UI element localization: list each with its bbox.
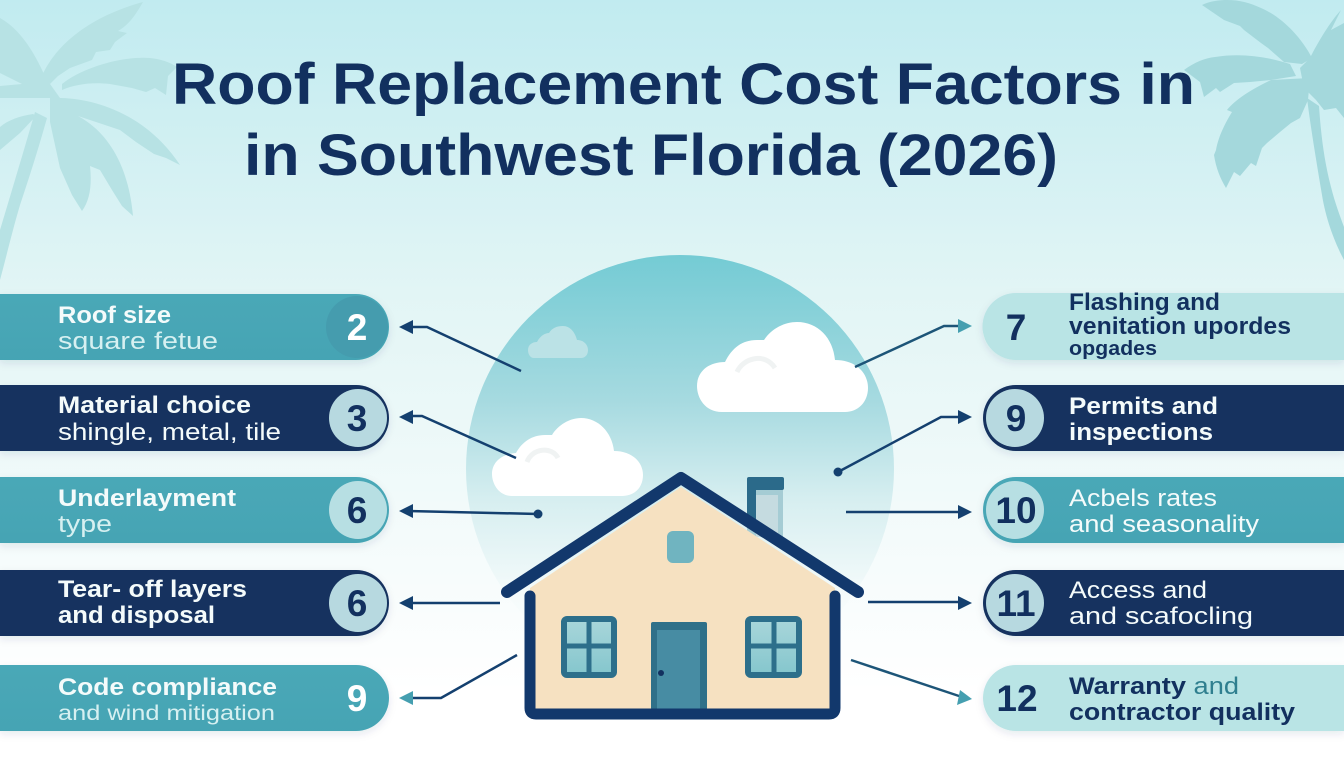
title xyxy=(172,52,1195,188)
bar xyxy=(0,294,389,360)
bar xyxy=(982,293,1344,360)
label xyxy=(1069,393,1218,446)
badge xyxy=(326,296,388,358)
label: and disposal xyxy=(58,602,215,629)
number: 11 xyxy=(996,583,1036,624)
bar xyxy=(983,477,1344,543)
label: and seasonality xyxy=(1069,511,1259,538)
left factor 1 xyxy=(0,294,389,360)
label: square fetue xyxy=(58,328,218,355)
bar xyxy=(983,385,1344,451)
left window xyxy=(564,619,614,675)
right window xyxy=(748,619,799,675)
door xyxy=(651,622,707,710)
number: 6 xyxy=(347,490,367,531)
label xyxy=(1069,485,1259,538)
arrow: to underlayment xyxy=(399,504,542,518)
house outline walls xyxy=(530,596,835,714)
label: Acbels rates xyxy=(1069,485,1217,512)
label xyxy=(58,674,277,725)
bar xyxy=(983,665,1344,731)
label: Roof size xyxy=(58,302,171,329)
title: Roof Replacement Cost Factors in xyxy=(172,52,1195,117)
label: and scafocling xyxy=(1069,603,1253,630)
number: 2 xyxy=(347,307,367,348)
number: 7 xyxy=(1006,307,1026,348)
right factor 5 xyxy=(983,665,1344,731)
arrow: to warranty xyxy=(851,660,972,705)
title: in Southwest Florida (2026) xyxy=(244,123,1058,188)
house attic vent xyxy=(667,531,694,563)
badge xyxy=(986,389,1044,447)
roof xyxy=(507,478,858,592)
icon: house xyxy=(507,477,858,714)
house chimney xyxy=(747,477,784,537)
icon: left cloud xyxy=(492,418,643,496)
arrow: to roof size xyxy=(399,320,521,371)
label: Underlayment xyxy=(58,485,236,512)
icon: left palm tree xyxy=(0,2,180,280)
label: opgades xyxy=(1069,338,1157,360)
label: Code compliance xyxy=(58,674,277,701)
label: type xyxy=(58,511,112,538)
label xyxy=(58,302,218,355)
bar xyxy=(0,570,389,636)
left factor 3 xyxy=(0,477,389,543)
icon: small cloud xyxy=(528,326,588,358)
number: 10 xyxy=(995,490,1037,531)
left factor 4 xyxy=(0,570,389,636)
label: Material choice xyxy=(58,392,251,419)
number: 9 xyxy=(347,678,367,719)
label xyxy=(1069,577,1253,630)
label: venitation upordes xyxy=(1069,313,1291,340)
icon: large cloud xyxy=(697,322,868,412)
arrow: to tear-off xyxy=(399,596,500,610)
label: inspections xyxy=(1069,419,1213,446)
label xyxy=(1069,673,1296,726)
arrow: to flashing xyxy=(855,319,972,367)
right factor 4 xyxy=(983,570,1344,636)
right factor 2 xyxy=(983,385,1344,451)
arrow: to access xyxy=(868,596,972,610)
arrow: to labor rates xyxy=(846,505,972,519)
sky circle xyxy=(466,255,894,683)
right factor 1 xyxy=(982,289,1344,360)
badge xyxy=(986,574,1044,632)
label: and wind mitigation xyxy=(58,702,275,725)
badge xyxy=(329,481,387,539)
arrow: to code compliance xyxy=(399,655,517,705)
label: Access and xyxy=(1069,577,1207,604)
label: Warranty and xyxy=(1069,673,1239,700)
label xyxy=(58,576,247,629)
right factor 3 xyxy=(983,477,1344,543)
label: Permits and xyxy=(1069,393,1218,420)
label xyxy=(58,485,236,538)
number: 6 xyxy=(347,583,367,624)
house wall xyxy=(530,487,835,714)
bar xyxy=(0,477,389,543)
arrow: to material choice xyxy=(399,410,516,458)
left factor 2 xyxy=(0,385,389,451)
arrow: to permits xyxy=(834,410,972,476)
icon: right palm tree xyxy=(1184,0,1344,260)
badge xyxy=(329,574,387,632)
badge xyxy=(986,481,1044,539)
bar xyxy=(983,570,1344,636)
label xyxy=(58,392,281,446)
bar xyxy=(0,665,389,731)
label xyxy=(1069,289,1291,360)
label: Tear- off layers xyxy=(58,576,247,603)
left factor 5 xyxy=(0,665,389,731)
number: 9 xyxy=(1006,398,1026,439)
badge xyxy=(329,389,387,447)
bar xyxy=(0,385,389,451)
number: 12 xyxy=(996,678,1038,719)
number: 3 xyxy=(347,398,367,439)
label: shingle, metal, tile xyxy=(58,419,281,446)
label: Flashing and xyxy=(1069,289,1220,316)
label: contractor quality xyxy=(1069,699,1296,726)
